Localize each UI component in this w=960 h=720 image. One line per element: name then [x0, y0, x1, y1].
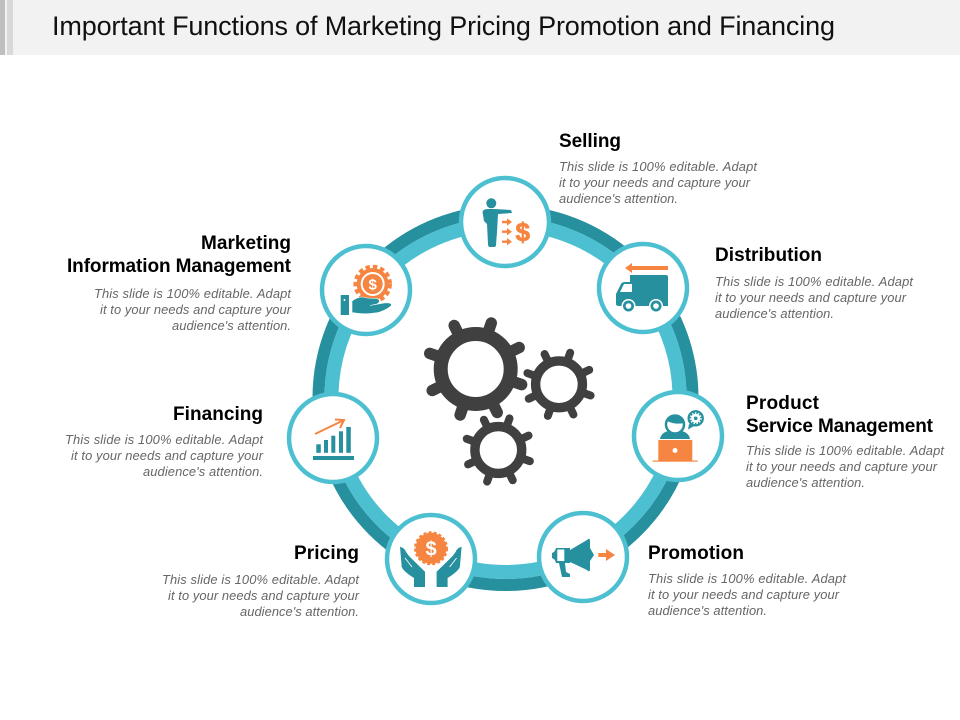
label: product service management: Product: [746, 393, 820, 414]
label: marketing information management: [67, 233, 292, 333]
label: marketing information management: This slide is 100% editable. Adapt: [94, 286, 292, 301]
label: distribution: This slide is 100% editable. Adapt: [715, 274, 914, 289]
label: pricing: [162, 543, 360, 619]
label: financing: audience's attention.: [143, 464, 263, 479]
large gear: [430, 323, 522, 415]
icon: pricing hands and badge: [400, 532, 462, 587]
label: distribution: Distribution: [715, 245, 822, 266]
label: marketing information management: audience's attention.: [172, 318, 291, 333]
label: selling: Selling: [559, 131, 621, 152]
label: marketing information management: it to your needs and capture your: [100, 302, 292, 317]
label: promotion: audience's attention.: [648, 603, 767, 618]
right gear: [527, 353, 591, 416]
label: marketing information management: Information Management: [67, 256, 292, 277]
icon: distribution truck: [616, 263, 668, 313]
label: distribution: audience's attention.: [715, 306, 834, 321]
label: distribution: [715, 245, 914, 321]
label: selling: it to your needs and capture your: [559, 175, 751, 190]
label: product service management: [746, 393, 945, 490]
label: promotion: it to your needs and capture your: [648, 587, 840, 602]
label: product service management: This slide is 100% editable. Adapt: [746, 443, 945, 458]
label: product service management: Service Management: [746, 416, 934, 437]
icon: promotion megaphone: [552, 539, 615, 577]
label: financing: [65, 404, 264, 479]
label: financing: it to your needs and capture your: [71, 448, 264, 463]
icon: selling: $: [515, 217, 530, 247]
label: product service management: it to your needs and capture your: [746, 459, 938, 474]
label: promotion: [648, 543, 847, 618]
gears: [430, 323, 591, 482]
label: pricing: it to your needs and capture your: [168, 588, 360, 603]
label: promotion: Promotion: [648, 543, 744, 564]
label: marketing information management: Marketing: [201, 233, 291, 254]
label: product service management: audience's attention.: [746, 475, 865, 490]
bottom gear: [467, 418, 530, 482]
icon: selling: [482, 198, 530, 247]
title: Important Functions of Marketing Pricing Promotion and Financing: [52, 11, 835, 41]
icon: product service person at laptop: [653, 410, 704, 462]
icon: marketing information hand and gear: $: [369, 276, 378, 294]
icon: marketing information hand and gear: [341, 266, 392, 315]
ring: [318, 211, 692, 585]
label: distribution: it to your needs and capture your: [715, 290, 907, 305]
label: financing: This slide is 100% editable. Adapt: [65, 432, 264, 447]
label: promotion: This slide is 100% editable. Adapt: [648, 571, 847, 586]
label: selling: audience's attention.: [559, 191, 678, 206]
label: selling: This slide is 100% editable. Adapt: [559, 159, 758, 174]
label: financing: Financing: [173, 404, 263, 425]
node circles: [289, 178, 722, 603]
icon: pricing hands and badge: $: [425, 538, 437, 560]
label: selling: [559, 131, 758, 206]
title bar: [0, 0, 960, 55]
label: pricing: audience's attention.: [240, 604, 359, 619]
icon: financing bar chart: [313, 420, 354, 460]
label: pricing: This slide is 100% editable. Adapt: [162, 572, 360, 587]
label: pricing: Pricing: [294, 543, 359, 564]
